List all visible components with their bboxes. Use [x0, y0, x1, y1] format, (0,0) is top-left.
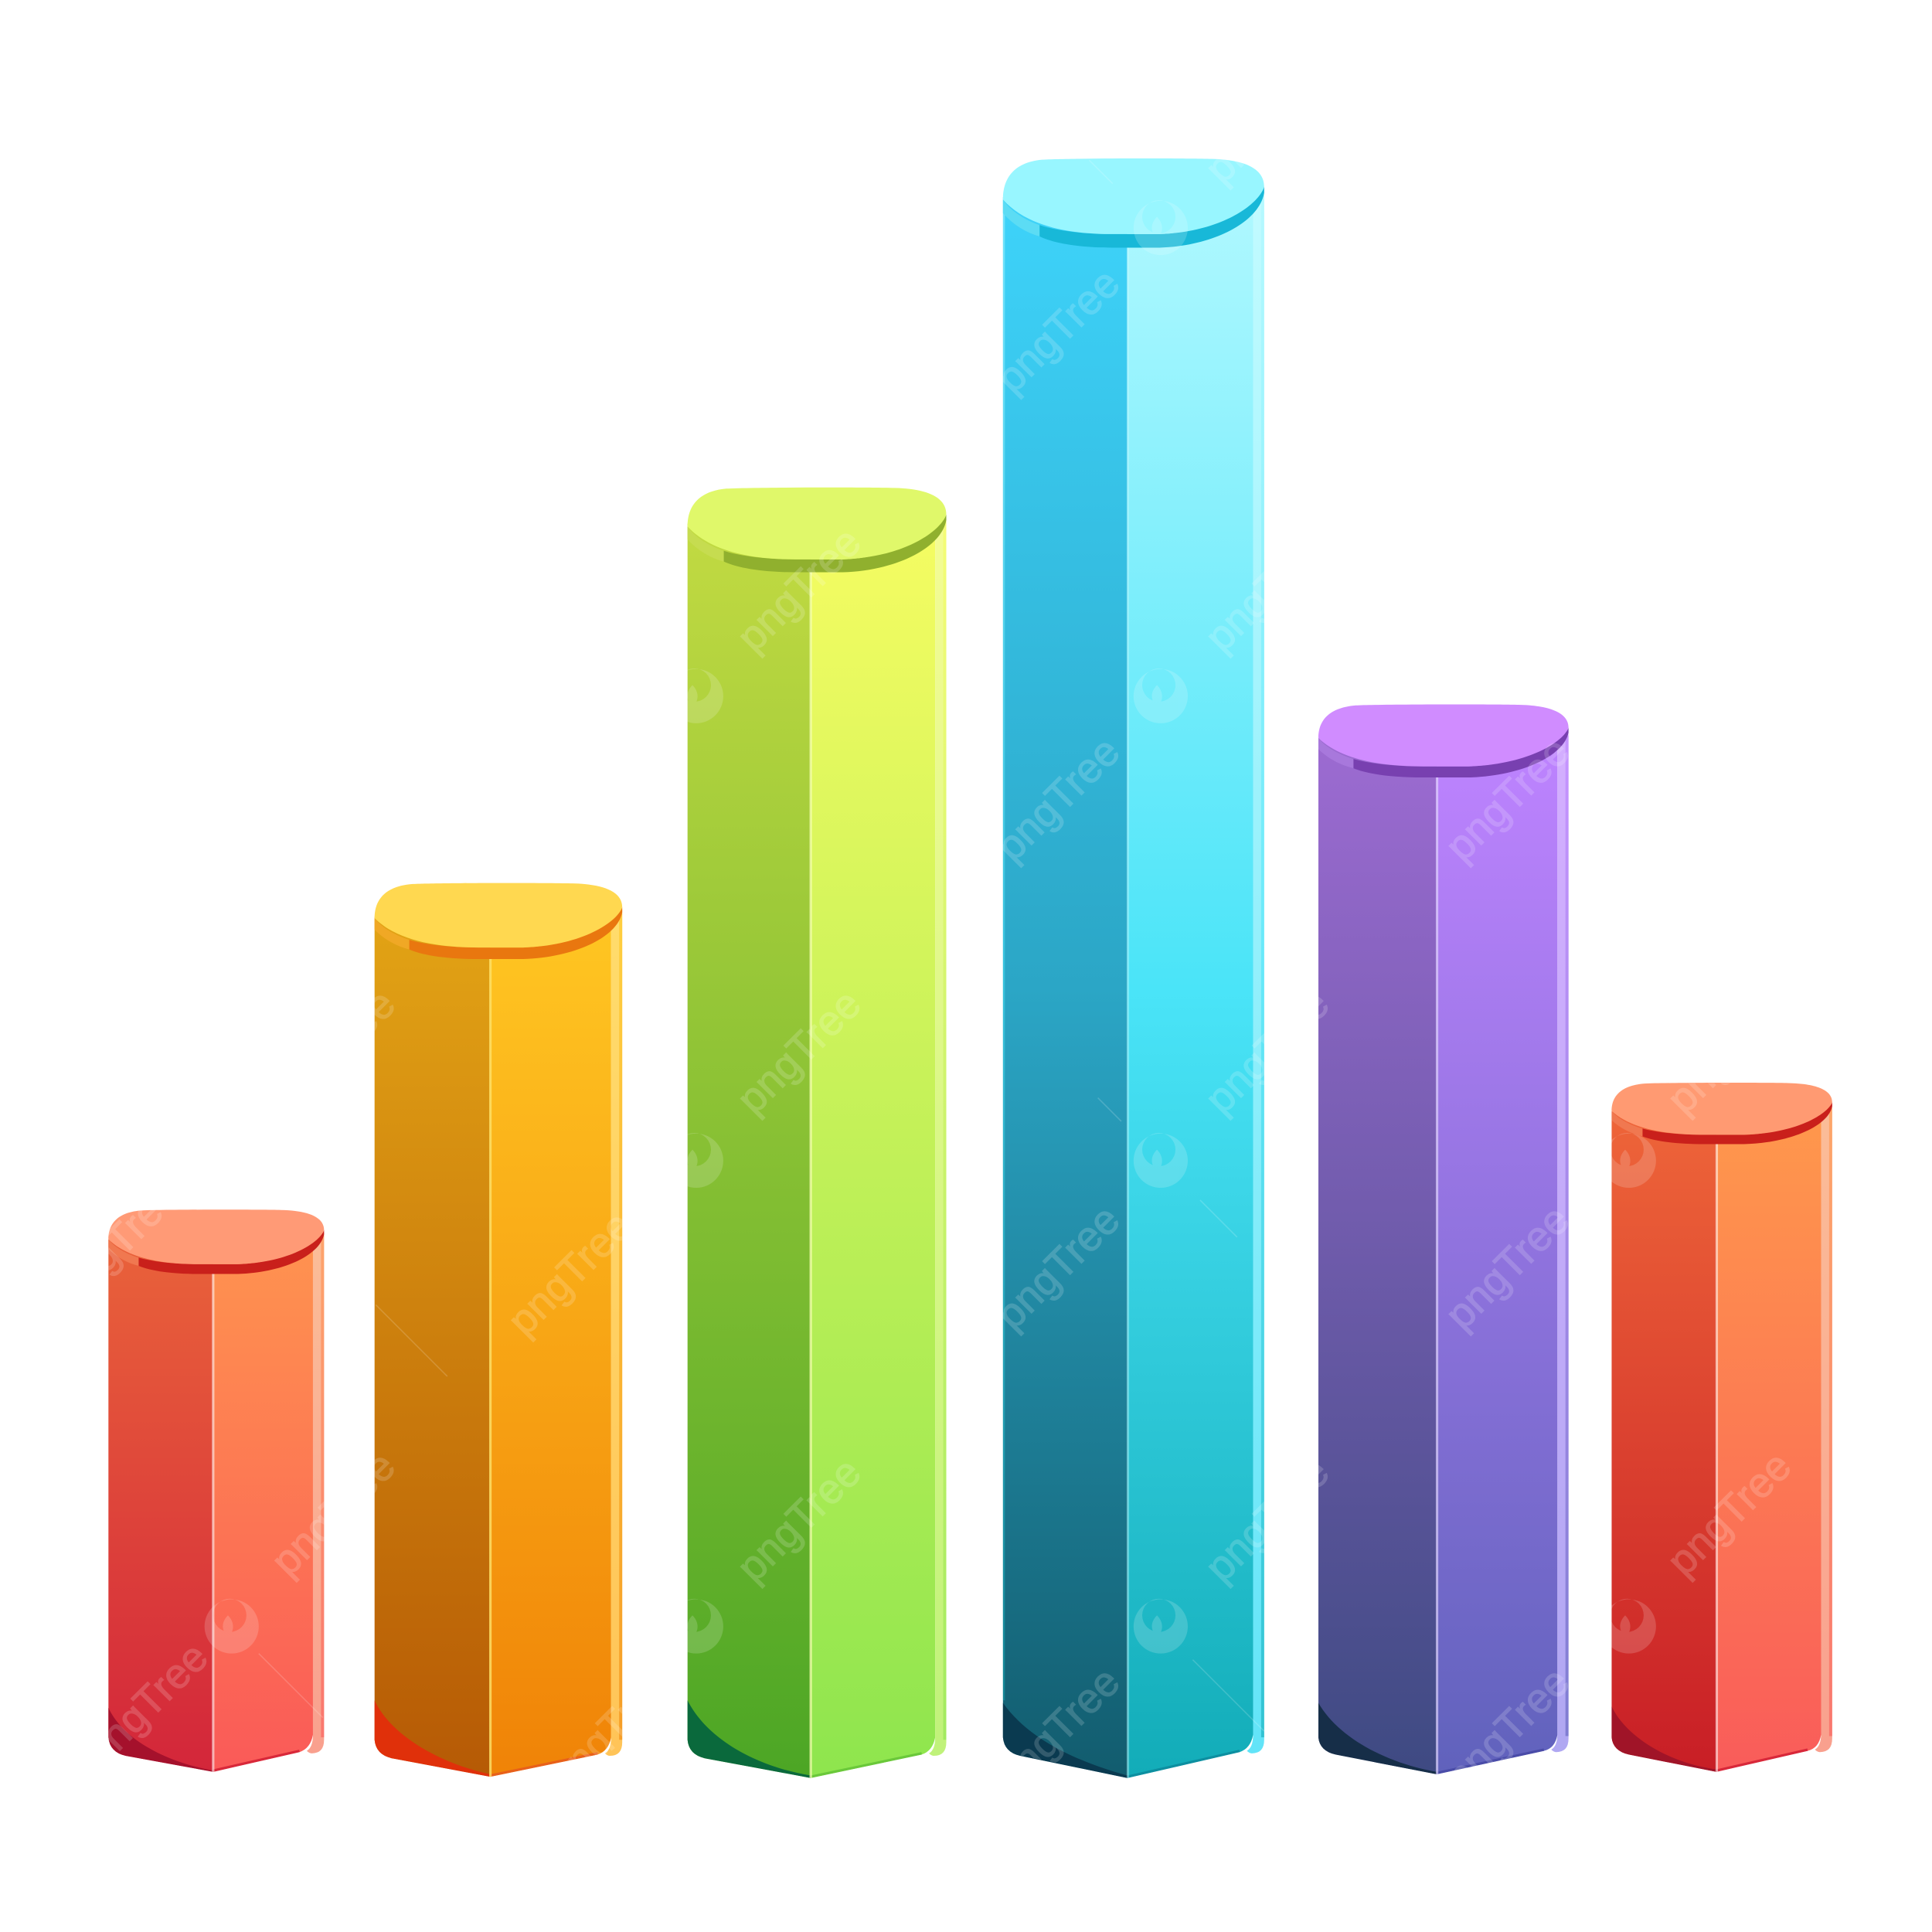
left face — [108, 1240, 213, 1772]
watermark: pngTree — [987, 1658, 1129, 1801]
bottom edge — [213, 1751, 299, 1770]
right edge highlight — [605, 910, 622, 1756]
cap — [1611, 1083, 1832, 1144]
cap — [1318, 704, 1569, 777]
cap — [375, 883, 622, 959]
right face — [1716, 1111, 1821, 1772]
watermark: pngTree — [1196, 519, 1338, 661]
left face — [1611, 1111, 1716, 1772]
right edge outer sliver — [1566, 736, 1569, 1736]
watermark: pngTree — [1196, 981, 1338, 1123]
watermark: pngTree — [987, 728, 1129, 870]
left face — [688, 524, 811, 1778]
centre edge — [810, 572, 812, 1778]
watermark: pngTree — [539, 1658, 682, 1801]
left face — [1003, 197, 1128, 1778]
bottom corner shadow — [108, 1708, 213, 1772]
watermark — [108, 159, 1790, 1770]
watermark: pngTree — [262, 1443, 404, 1585]
bar 3: green — [688, 488, 946, 1778]
watermark: pngTree — [1437, 728, 1579, 870]
cap — [108, 1209, 324, 1274]
right face — [491, 918, 611, 1777]
watermark: pngTree — [1196, 50, 1338, 192]
right edge outer sliver — [619, 913, 622, 1740]
watermark: pngTree — [1437, 1196, 1579, 1338]
watermark: pngTree — [262, 981, 404, 1123]
right face — [1128, 201, 1253, 1778]
bar 6: red-orange — [1611, 1083, 1832, 1772]
bar chart — [108, 158, 1832, 1778]
watermark: pngTree — [728, 519, 870, 661]
left edge sliver — [1003, 209, 1005, 1700]
right face — [811, 527, 935, 1778]
bottom corner shadow — [1318, 1702, 1437, 1774]
centre edge — [1436, 776, 1438, 1774]
right edge outer sliver — [944, 521, 946, 1740]
bar 4: cyan — [1003, 158, 1264, 1778]
bar 2: orange — [375, 883, 622, 1777]
centre edge — [489, 956, 492, 1777]
centre edge — [1716, 1142, 1718, 1772]
cap — [1003, 158, 1264, 247]
bottom corner shadow — [375, 1700, 491, 1777]
bottom edge — [491, 1753, 597, 1776]
bottom edge — [811, 1753, 922, 1777]
watermark: pngTree — [499, 1202, 641, 1345]
bottom corner shadow — [688, 1700, 811, 1778]
right edge highlight — [307, 1232, 324, 1753]
watermark: pngTree — [987, 1196, 1129, 1338]
right edge outer sliver — [1261, 195, 1264, 1737]
bottom edge — [1437, 1750, 1544, 1773]
watermark: pngTree — [728, 981, 870, 1123]
bottom edge — [1128, 1751, 1240, 1777]
watermark: pngTree — [1658, 1443, 1801, 1585]
watermark: pngTree — [1658, 981, 1801, 1123]
right edge highlight — [1247, 191, 1264, 1753]
bottom corner shadow — [1611, 1706, 1716, 1772]
watermark: pngTree — [987, 260, 1129, 402]
centre edge — [212, 1267, 214, 1772]
centre edge — [1127, 247, 1129, 1778]
right face — [1437, 740, 1557, 1774]
watermark: pngTree — [1196, 1449, 1338, 1591]
right edge highlight — [1551, 732, 1569, 1752]
right edge outer sliver — [1829, 1107, 1832, 1736]
right edge highlight — [929, 518, 946, 1756]
left face — [1318, 736, 1437, 1774]
right edge outer sliver — [321, 1235, 324, 1737]
watermark: pngTree — [46, 1172, 189, 1314]
watermark: pngTree — [728, 1449, 870, 1591]
bottom corner shadow — [1003, 1702, 1128, 1778]
left face — [375, 917, 491, 1777]
watermark: pngTree — [75, 1634, 217, 1776]
cap — [688, 488, 946, 572]
bottom edge — [1716, 1750, 1808, 1770]
bar 1: red — [108, 1209, 324, 1772]
right edge highlight — [1815, 1104, 1832, 1752]
bar 5: purple — [1318, 704, 1569, 1774]
watermark: pngTree — [1437, 1658, 1579, 1801]
right face — [213, 1238, 313, 1772]
